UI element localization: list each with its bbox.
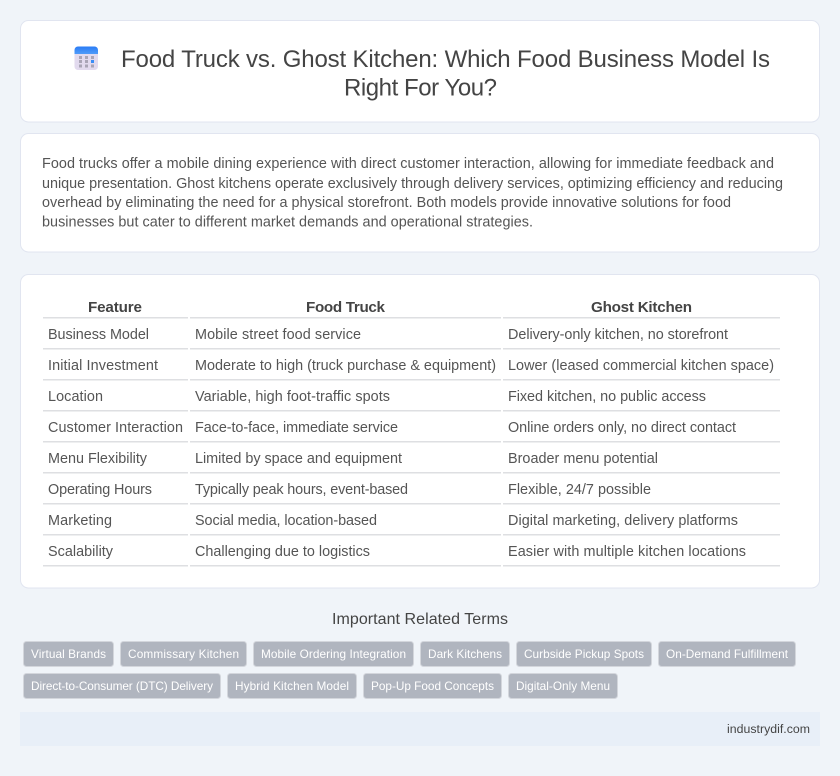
tag: direct-to-consumer delivery: Direct-to-Consumer (DTC) Delivery [31, 679, 213, 693]
table header row: Food Truck [306, 299, 386, 316]
table header row: Ghost Kitchen [591, 299, 692, 316]
row: initial investment: Initial Investment [48, 358, 158, 374]
table header row: Feature [88, 299, 142, 316]
footer bar [20, 712, 820, 746]
row: scalability: Challenging due to logistics [195, 544, 370, 560]
row: operating hours: Operating Hours [48, 482, 152, 498]
tag: commissary kitchen: Commissary Kitchen [128, 647, 239, 661]
tag: on-demand fulfillment [658, 642, 796, 666]
tag: on-demand fulfillment: On-Demand Fulfillment [666, 647, 789, 661]
row: customer interaction: Face-to-face, immediate service [195, 420, 398, 436]
tag: mobile ordering integration [254, 642, 414, 666]
row: marketing: Social media, location-based [195, 513, 377, 529]
tag: digital-only menu [508, 674, 618, 698]
row: menu flexibility [48, 451, 658, 467]
row: initial investment [48, 358, 774, 374]
row: scalability: Easier with multiple kitchen locations [508, 544, 746, 560]
row: location [48, 389, 706, 405]
row: customer interaction: Customer Interaction [48, 420, 183, 436]
table header row [88, 299, 692, 316]
tag: pop-up food concepts [364, 674, 502, 698]
row: marketing [48, 513, 738, 529]
row: customer interaction [48, 420, 736, 436]
intro paragraph: overhead by eliminating the need for a physical storefront. Both models provide innovative solutions for food [42, 195, 731, 211]
row: menu flexibility: Limited by space and equipment [195, 451, 402, 467]
row: marketing: Digital marketing, delivery platforms [508, 513, 738, 529]
row: menu flexibility: Broader menu potential [508, 451, 658, 467]
row: location: Fixed kitchen, no public access [508, 389, 706, 405]
row: operating hours: Flexible, 24/7 possible [508, 482, 651, 498]
tag: direct-to-consumer delivery [24, 674, 220, 698]
title: Food Truck vs. Ghost Kitchen: Which Food Business Model Is [121, 46, 770, 73]
tag: commissary kitchen [120, 642, 246, 666]
row: scalability: Scalability [48, 544, 114, 560]
panel: header [20, 20, 820, 122]
panel: introduction [20, 134, 820, 252]
row: initial investment: Lower (leased commercial kitchen space) [508, 358, 774, 374]
row: operating hours [48, 482, 651, 498]
tag: hybrid kitchen model [228, 674, 356, 698]
row: business model: Delivery-only kitchen, no storefront [508, 327, 728, 343]
row: business model [48, 327, 728, 343]
title [121, 46, 770, 102]
tag: mobile ordering integration: Mobile Ordering Integration [261, 647, 406, 661]
tag: dark kitchens: Dark Kitchens [428, 647, 502, 661]
tag: pop-up food concepts: Pop-Up Food Concepts [371, 679, 494, 693]
title: Right For You? [344, 74, 497, 102]
related terms heading: Important Related Terms [332, 611, 508, 628]
related terms tags [24, 642, 796, 698]
tag: hybrid kitchen model: Hybrid Kitchen Model [235, 679, 349, 693]
intro paragraph [42, 156, 783, 230]
row: scalability [48, 544, 746, 560]
intro paragraph: unique presentation. Ghost kitchens operate exclusively through delivery services, optimizing efficiency and reducing [42, 176, 783, 192]
row: marketing: Marketing [48, 513, 112, 529]
panel: comparison table [20, 274, 820, 588]
row: business model: Mobile street food service [195, 327, 361, 343]
row: location: Location [48, 389, 103, 405]
tag: curbside pickup spots: Curbside Pickup Spots [524, 647, 644, 661]
row: customer interaction: Online orders only, no direct contact [508, 420, 736, 436]
tag: dark kitchens [420, 642, 510, 666]
icon: calendar [74, 46, 98, 70]
tag: curbside pickup spots [516, 642, 652, 666]
tag: digital-only menu: Digital-Only Menu [516, 679, 610, 693]
row: location: Variable, high foot-traffic spots [195, 389, 390, 405]
intro paragraph: Food trucks offer a mobile dining experience with direct customer interaction, allowing for immediate feedback and [42, 156, 774, 172]
row: initial investment: Moderate to high (truck purchase & equipment) [195, 358, 496, 374]
row: operating hours: Typically peak hours, event-based [195, 482, 408, 498]
row: menu flexibility: Menu Flexibility [48, 451, 148, 467]
row: business model: Business Model [48, 327, 149, 343]
footer bar: industrydif.com [727, 722, 810, 736]
tag: virtual brands: Virtual Brands [31, 647, 106, 661]
tag: virtual brands [24, 642, 114, 666]
intro paragraph: businesses but cater to different market demands and operational strategies. [42, 214, 533, 230]
